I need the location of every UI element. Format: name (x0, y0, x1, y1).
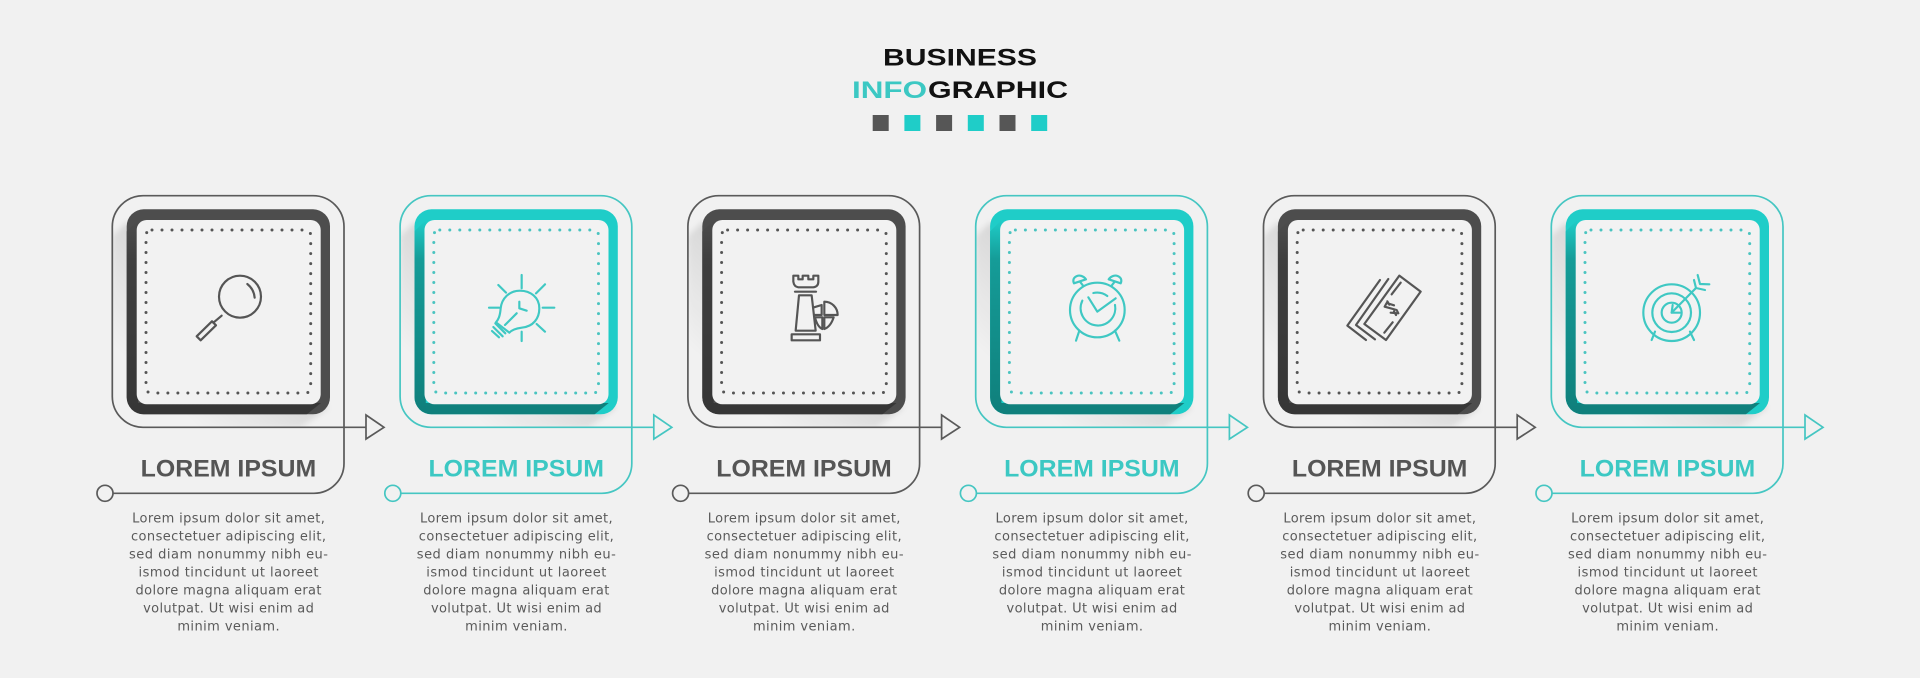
body text (992, 512, 1192, 635)
title (852, 44, 1068, 104)
body text: minim veniam. (465, 620, 567, 635)
icon: target with arrow (1643, 275, 1709, 341)
connector line and arrow (97, 196, 384, 501)
body text: minim veniam. (1041, 620, 1143, 635)
icon: magnifier (197, 276, 261, 340)
body text: sed diam nonummy nibh eu- (417, 548, 616, 563)
body text (129, 512, 328, 635)
body text: volutpat. Ut wisi enim ad (431, 602, 602, 617)
connector line and arrow (1536, 196, 1823, 501)
body text (417, 512, 616, 635)
body text: volutpat. Ut wisi enim ad (719, 602, 889, 617)
heading: LOREM IPSUM (1580, 456, 1755, 483)
body text: ismod tincidunt ut laoreet (138, 566, 318, 581)
body text: ismod tincidunt ut laoreet (1290, 566, 1470, 581)
body text: minim veniam. (1616, 620, 1719, 635)
frame square (702, 209, 906, 415)
icon: alarm clock (1070, 276, 1125, 341)
panel: step 1 (97, 196, 384, 635)
body text: consectetuer adipiscing elit, (1282, 530, 1477, 545)
panel: step 3 (673, 196, 960, 635)
heading: LOREM IPSUM (716, 456, 892, 483)
body text: Lorem ipsum dolor sit amet, (1571, 512, 1764, 527)
body text: consectetuer adipiscing elit, (1570, 530, 1765, 545)
panel: step 6 (1536, 196, 1823, 635)
body text: minim veniam. (753, 620, 855, 635)
body text: Lorem ipsum dolor sit amet, (708, 512, 900, 527)
title: INFO (852, 77, 927, 104)
panel: step 4 (960, 196, 1247, 635)
body text: Lorem ipsum dolor sit amet, (996, 512, 1188, 527)
body text: Lorem ipsum dolor sit amet, (132, 512, 325, 527)
body text: volutpat. Ut wisi enim ad (1582, 602, 1753, 617)
body text: sed diam nonummy nibh eu- (1280, 548, 1479, 563)
heading: LOREM IPSUM (141, 456, 316, 483)
icon: chess rook with shield (792, 276, 838, 340)
body text (1280, 512, 1479, 635)
body text: dolore magna aliquam erat (999, 584, 1185, 599)
body text: sed diam nonummy nibh eu- (705, 548, 904, 563)
title: GRAPHIC (928, 77, 1068, 104)
body text: Lorem ipsum dolor sit amet, (420, 512, 613, 527)
body text: sed diam nonummy nibh eu- (129, 548, 328, 563)
body text: ismod tincidunt ut laoreet (1002, 566, 1182, 581)
body text: consectetuer adipiscing elit, (994, 530, 1189, 545)
heading: LOREM IPSUM (1004, 456, 1180, 483)
body text: volutpat. Ut wisi enim ad (143, 602, 314, 617)
heading: LOREM IPSUM (1292, 456, 1467, 483)
panel: step 5 (1248, 196, 1535, 635)
body text: dolore magna aliquam erat (423, 584, 609, 599)
body text: minim veniam. (177, 620, 280, 635)
frame square (126, 209, 330, 415)
body text: dolore magna aliquam erat (1287, 584, 1473, 599)
frame square (414, 209, 618, 415)
body text: consectetuer adipiscing elit, (707, 530, 902, 545)
body text: dolore magna aliquam erat (136, 584, 322, 599)
body text: sed diam nonummy nibh eu- (992, 548, 1192, 563)
icon: light bulb (489, 275, 554, 341)
body text: consectetuer adipiscing elit, (419, 530, 614, 545)
icon: banknotes (1347, 276, 1421, 340)
body text: volutpat. Ut wisi enim ad (1007, 602, 1177, 617)
frame square (1565, 209, 1769, 415)
connector line and arrow (673, 196, 960, 501)
body text: dolore magna aliquam erat (711, 584, 897, 599)
body text: minim veniam. (1329, 620, 1431, 635)
body text (1568, 512, 1767, 635)
body text: ismod tincidunt ut laoreet (714, 566, 894, 581)
frame square (989, 209, 1193, 415)
body text: consectetuer adipiscing elit, (131, 530, 326, 545)
body text (705, 512, 904, 635)
heading: LOREM IPSUM (428, 456, 604, 483)
connector line and arrow (385, 196, 672, 501)
body text: volutpat. Ut wisi enim ad (1294, 602, 1465, 617)
body text: dolore magna aliquam erat (1574, 584, 1760, 599)
connector line and arrow (960, 196, 1247, 501)
connector line and arrow (1248, 196, 1535, 501)
body text: ismod tincidunt ut laoreet (1578, 566, 1758, 581)
title squares (873, 115, 1047, 131)
frame square (1277, 209, 1481, 415)
body text: sed diam nonummy nibh eu- (1568, 548, 1767, 563)
body text: ismod tincidunt ut laoreet (426, 566, 606, 581)
body text: Lorem ipsum dolor sit amet, (1283, 512, 1476, 527)
title: BUSINESS (883, 44, 1037, 72)
panel: step 2 (385, 196, 672, 635)
